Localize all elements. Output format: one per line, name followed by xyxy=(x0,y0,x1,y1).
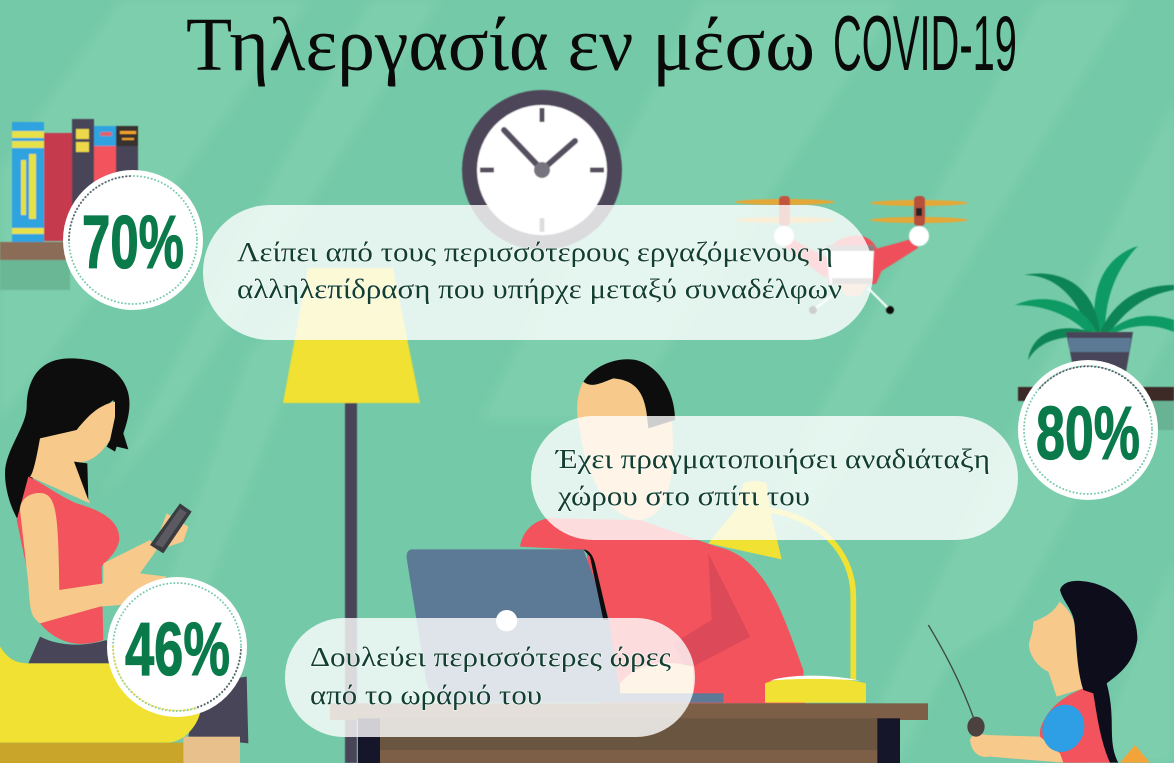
icon: drone xyxy=(735,196,968,314)
panel: 80 percent statement: χώρου στο σπίτι του xyxy=(557,481,810,511)
icon: floor lamp xyxy=(283,268,420,763)
icon: wall clock xyxy=(462,90,622,250)
panel: 70 percent statement xyxy=(203,205,873,340)
panel: 80 percent statement xyxy=(531,416,1018,540)
illustration: man at desk with laptop and desk lamp xyxy=(330,359,928,763)
badge: 46% xyxy=(107,577,247,717)
illustration: child with remote control xyxy=(928,581,1150,763)
panel: 80 percent statement: Έχει πραγματοποιήσει αναδιάταξη xyxy=(555,444,990,474)
illustration: woman with phone on sofa xyxy=(0,358,248,763)
panel: 46 percent statement xyxy=(285,618,695,737)
panel: 70 percent statement: Λείπει από τους περισσότερους εργαζόμενους η xyxy=(237,237,833,267)
icon: books on shelf xyxy=(0,119,138,290)
badge: 46%: 46% xyxy=(125,607,230,691)
panel: 70 percent statement: αλληλεπίδραση που υπήρχε μεταξύ συναδέλφων xyxy=(237,274,842,304)
badge: 80% xyxy=(1018,360,1158,500)
badge: 70% xyxy=(63,170,203,310)
panel: 46 percent statement: Δουλεύει περισσότερες ώρες xyxy=(310,642,671,672)
panel: 46 percent statement: από το ωράριό του xyxy=(310,680,542,710)
title: Τηλεργασία εν μέσω xyxy=(186,3,815,87)
badge: 70%: 70% xyxy=(82,200,184,284)
icon: potted plant on shelf xyxy=(1015,246,1174,430)
